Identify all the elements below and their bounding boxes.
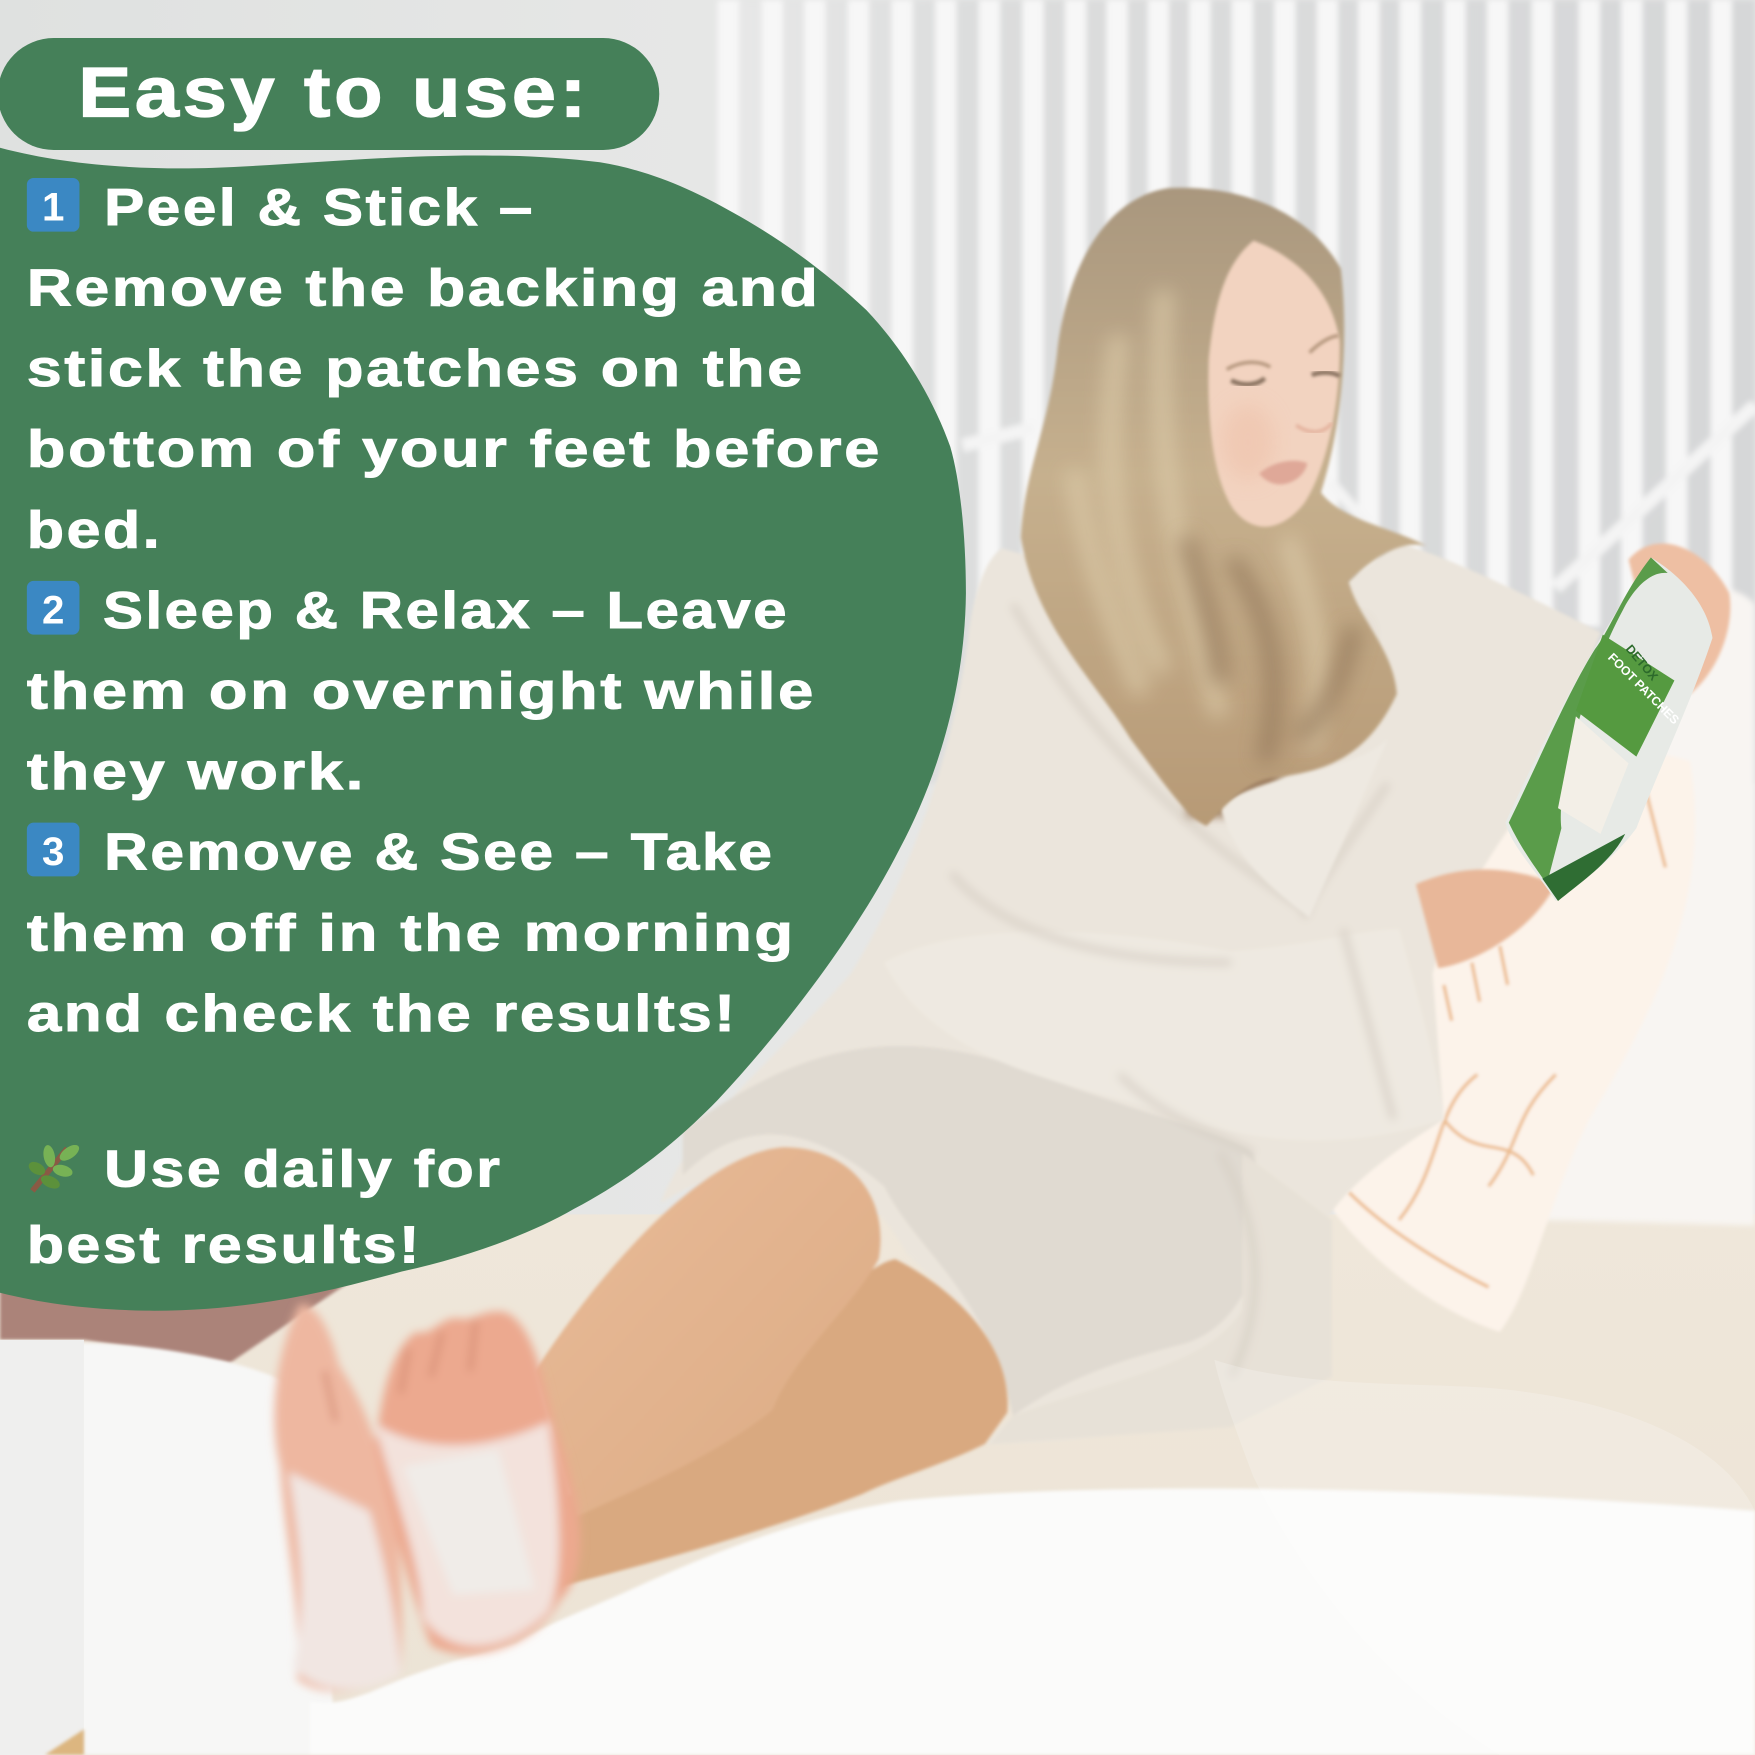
bed surface (0, 1214, 1755, 1755)
robe (660, 543, 1601, 1444)
wall (0, 0, 1755, 1377)
neck shadow (1186, 481, 1315, 817)
tip line 1: Use daily for (104, 1139, 503, 1197)
step 3 line 2: and check the results! (27, 984, 738, 1042)
hair shadows (1186, 537, 1354, 761)
step 1 line 2: stick the patches on the (27, 339, 805, 397)
step 1 heading: Peel & Stick – (104, 178, 535, 236)
legs (535, 1147, 1008, 1589)
white slatted headboard (716, 0, 1755, 783)
back foot patch (289, 1472, 401, 1689)
step 2 line 1: them on overnight while (27, 661, 816, 719)
panel: green blob (0, 148, 966, 1311)
hair highlights (1074, 291, 1319, 750)
lower hand (1416, 869, 1556, 968)
lower robe drape (991, 1153, 1332, 1444)
front foot (375, 1311, 580, 1654)
left duvet strip (0, 1340, 84, 1755)
icon: keycap 1 (27, 178, 79, 232)
pouch subtitle: FOOT PATCHES (1605, 650, 1682, 727)
icon: herb (26, 1142, 82, 1191)
step 3 heading: Remove & See – Take (104, 823, 775, 881)
foreground white duvet (0, 1343, 1755, 1755)
nose and lips (1296, 423, 1332, 432)
pouch side leaves (1509, 557, 1668, 884)
tip line 2: best results! (27, 1216, 422, 1274)
white quilt, right (1455, 589, 1755, 1226)
step 2 heading: Sleep & Relax – Leave (103, 581, 789, 639)
inner robe (1220, 739, 1388, 918)
pouch (1505, 557, 1712, 901)
hair (1021, 188, 1427, 826)
icon: keycap 1: 1 (42, 184, 64, 229)
sleeve (884, 929, 1444, 1140)
face (1208, 241, 1340, 527)
pouch bottom band (1542, 834, 1625, 901)
text block: step 3 (27, 823, 796, 1042)
pouch green panel (1576, 635, 1674, 757)
feet with detox patches (274, 1304, 580, 1691)
cheek glow (1221, 404, 1275, 480)
patterned pillow (1310, 743, 1695, 1332)
title: Easy to use: (78, 52, 590, 131)
bottom left orange corner (45, 1729, 84, 1755)
upper leg and knee (535, 1147, 881, 1517)
toe gaps (325, 1321, 476, 1421)
product pouch with hand (1416, 543, 1730, 968)
step 1 line 3: bottom of your feet before (27, 420, 882, 478)
step 1 line 1: Remove the backing and (27, 259, 820, 317)
lap shading (683, 1046, 1262, 1416)
eyes and brows (1227, 336, 1339, 369)
text block: step 2 (27, 581, 816, 800)
title pill (0, 38, 659, 150)
step 1 line 4: bed. (27, 500, 162, 558)
text block: step 1 (27, 178, 882, 558)
step 2 line 2: they work. (27, 742, 366, 800)
text block: daily use tip (26, 1139, 503, 1274)
front foot patch (375, 1421, 559, 1646)
icon: keycap 2: 2 (42, 587, 64, 632)
back foot (274, 1304, 402, 1691)
dusty pink floor band (0, 1276, 358, 1363)
upper hand (1629, 543, 1730, 694)
icon: keycap 3: 3 (42, 829, 64, 874)
icon: keycap 2 (27, 581, 79, 635)
pouch feet picture (1558, 716, 1629, 834)
translucent logo swirl (1214, 1360, 1755, 1755)
lower leg (548, 1259, 1008, 1589)
icon: keycap 3 (27, 823, 79, 876)
robe body (660, 543, 1601, 1444)
step 3 line 1: them off in the morning (27, 903, 796, 961)
pouch title: DETOX (1623, 642, 1661, 684)
folds (951, 604, 1393, 1377)
